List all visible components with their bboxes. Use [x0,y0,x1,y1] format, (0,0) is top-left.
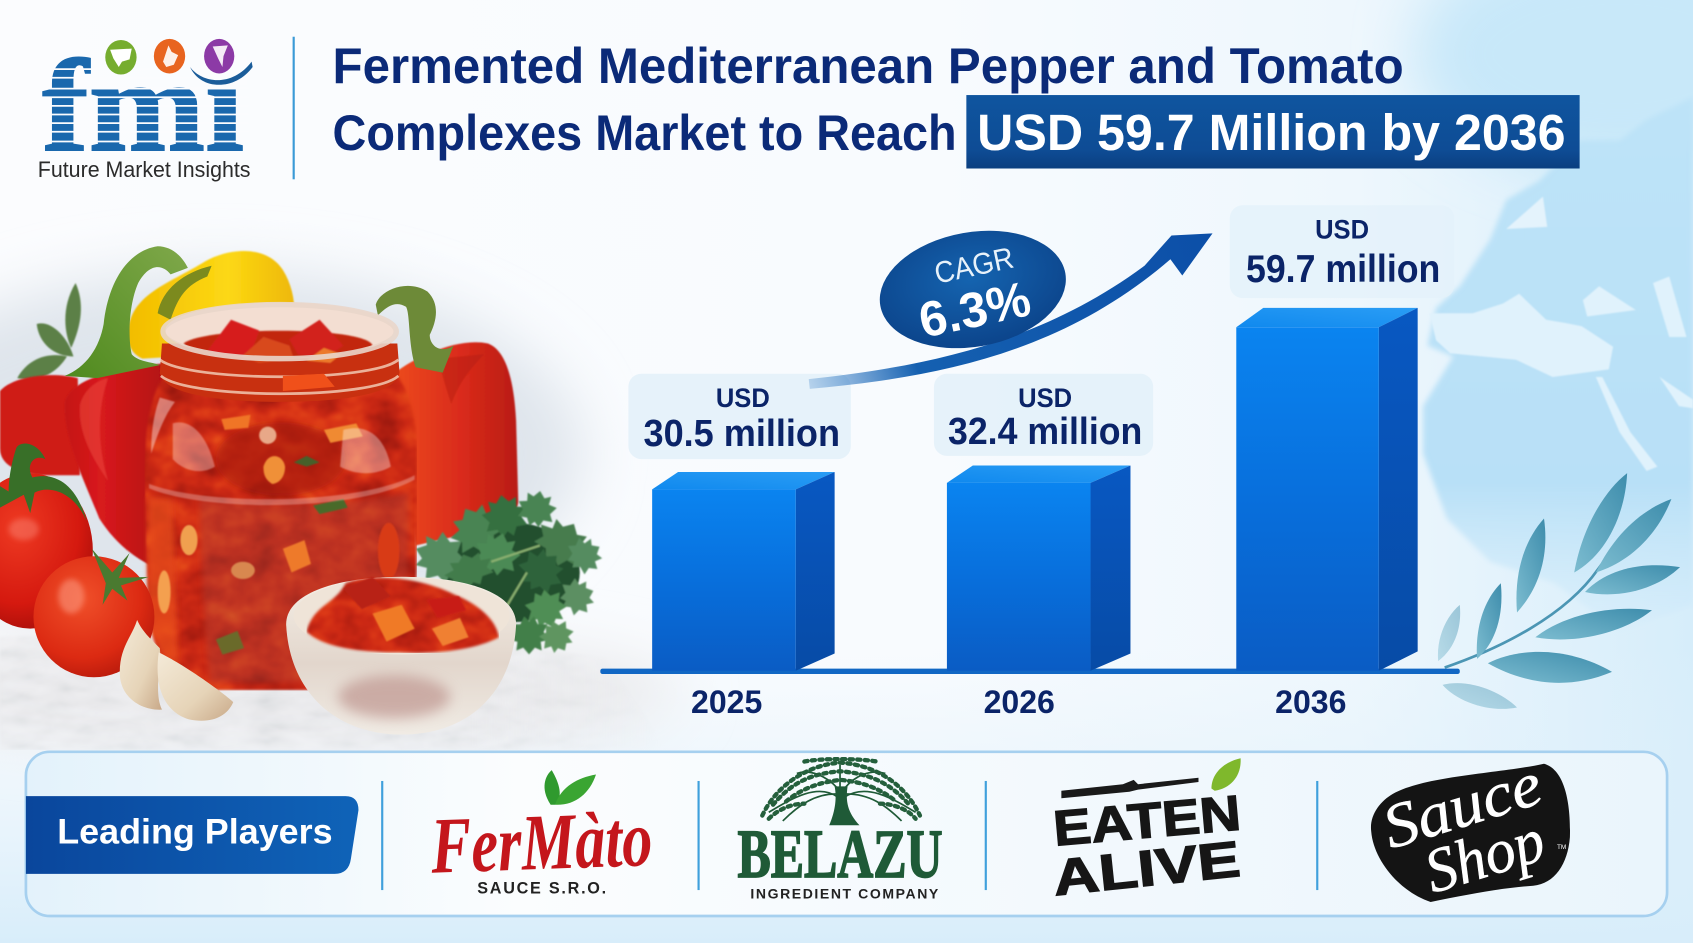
olive branch [1438,473,1680,709]
value label 2026: USD [1018,383,1072,413]
value label 2025: USD [716,383,770,413]
logo: Future Market Insights [37,34,253,182]
jar glass highlights [149,398,415,505]
logo letters fmi: fmi [42,34,244,179]
parsley bunch [407,488,609,659]
bowl of sauce [286,577,516,735]
persian gulf [1660,377,1693,408]
logo wordmark: Future Market Insights [38,157,250,182]
jar interior [165,302,394,359]
right red pepper [395,342,518,545]
logo: Belazu: BELAZU [737,815,943,892]
value label 2025: 30.5 million [644,413,840,455]
logo: Sauce Shop: TM [1557,844,1566,851]
jar rim [163,305,396,359]
green pepper stem [65,246,188,378]
value label 2036 [1230,205,1454,298]
glass jar of fermented peppers [145,302,417,690]
leading players tag [26,796,358,874]
CAGR badge: 6.3% [914,271,1035,349]
jar body [145,376,417,690]
caspian sea [1653,277,1687,337]
jar left orange edge [148,497,178,675]
right pepper stem [376,286,453,373]
olive leaves [1438,473,1680,709]
title line 2: Complexes Market to Reach [333,105,957,161]
logo: FerMàto: FerMàto [429,795,654,891]
tree emblem [762,759,920,825]
logo: FerMàto: SAUCE S.R.O. [477,879,609,897]
garlic cloves [120,620,233,721]
CAGR badge: CAGR [932,242,1017,291]
bar 2026 [947,466,1130,671]
jar lower tint [200,493,408,683]
value label 2026 [934,374,1153,456]
title line 1: Fermented Mediterranean Pepper and Tomato [333,38,1404,94]
panel separators [381,781,1318,890]
sauce in bowl [307,577,499,653]
region badge: americas [105,40,137,75]
left tomato [0,444,93,629]
jar darker centre [216,422,346,496]
value label 2025 [628,374,851,459]
jar top contents [184,320,373,363]
title [333,38,1580,169]
bar 2036 [1236,308,1418,671]
value label 2026: 32.4 million [948,411,1142,453]
yellow pepper [128,251,294,359]
logo: Belazu: INGREDIENT COMPANY [750,886,939,902]
arc over the i [190,62,253,85]
mediterranean sea [1430,294,1613,377]
value label 2036: USD [1315,215,1369,245]
title highlight: USD 59.7 Million by 2036 [977,104,1566,161]
bar chart [600,205,1460,720]
logo: Sauce Shop [1371,748,1570,907]
logo: FerMàto [429,770,654,897]
large red pepper [65,363,168,572]
front tomato [33,549,154,677]
black sea [1583,286,1636,316]
CAGR badge [870,217,1075,362]
year labels [691,684,1346,720]
logo: Sauce Shop: Sauce [1374,748,1550,862]
year labels: 2036 [1275,684,1346,720]
logo: Eaten Alive [1050,758,1243,906]
logo: Eaten Alive: ALIVE [1050,830,1243,906]
year labels: 2025 [691,684,762,720]
photo backdrop and stone table [0,270,680,750]
region badge: europe [154,39,185,73]
header divider [293,37,295,179]
britain [1506,197,1547,229]
jar neck [160,343,399,402]
growth arrow [809,233,1213,389]
world map backdrop [1423,97,1693,632]
logo: Sauce Shop: Shop [1416,804,1553,907]
chart baseline [600,669,1460,674]
value label 2036: 59.7 million [1246,248,1440,291]
year labels: 2026 [984,684,1055,720]
logo: Eaten Alive: EATEN [1051,785,1243,857]
herb sprig behind pepper [17,283,81,379]
red sea [1596,377,1657,471]
logo: Belazu [737,759,943,902]
bar 2025 [652,472,835,671]
jar contents [158,415,399,655]
land mass [1423,97,1693,632]
food photo illustration [0,246,680,750]
leading players panel [26,748,1667,916]
region badge: asia [204,39,234,73]
leading players tag: Leading Players [57,812,333,852]
far left red pepper [0,375,80,475]
